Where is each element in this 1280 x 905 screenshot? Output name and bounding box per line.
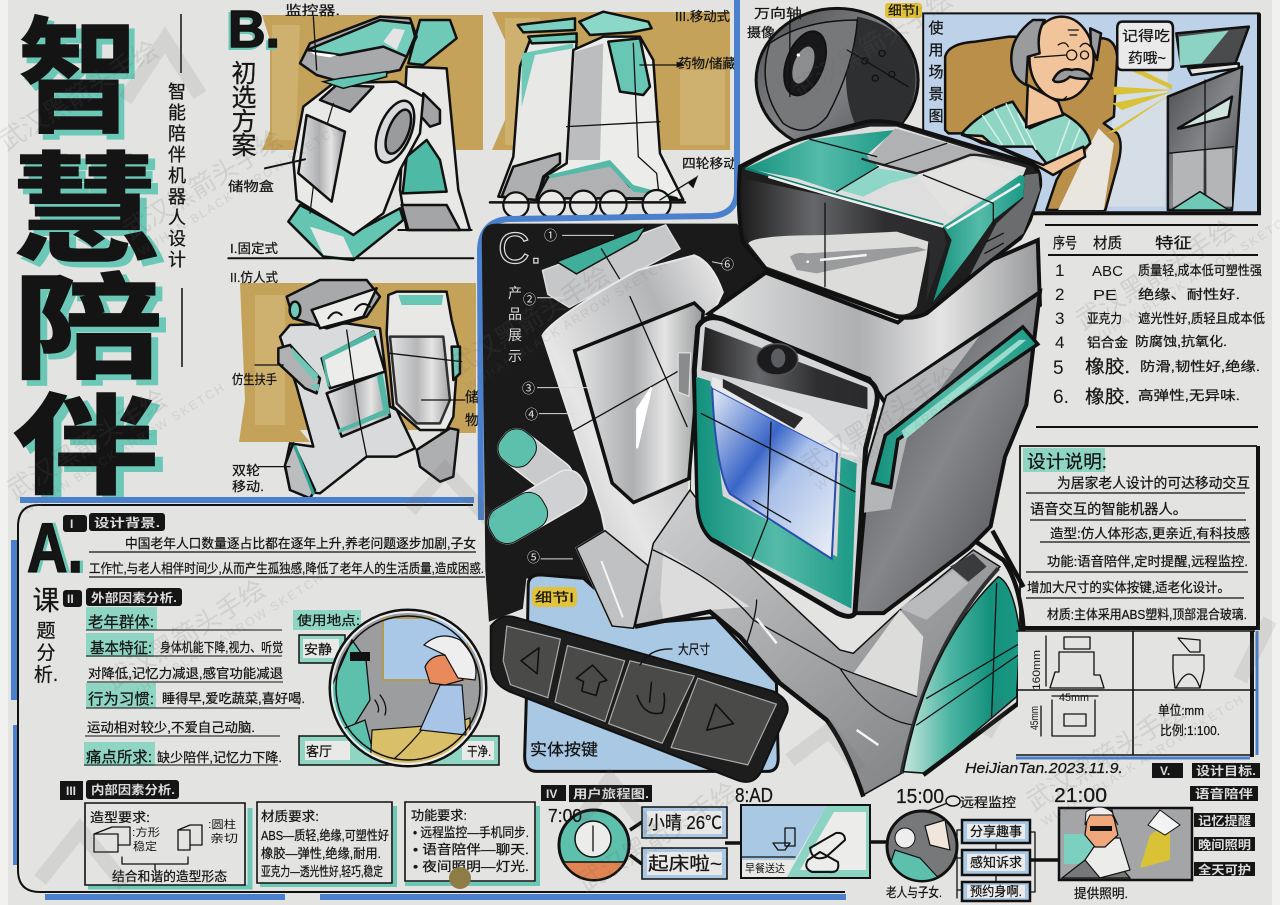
usage scenarios: 干净.: [467, 744, 491, 759]
weather card: 小晴 26℃: [648, 813, 722, 833]
panel C labels: 示: [508, 348, 522, 364]
21:00 night light: [1054, 785, 1192, 901]
blue frame separating section B: [480, 0, 737, 520]
materials table: PE: [1093, 287, 1117, 304]
panel A: analysis: [14, 500, 846, 897]
part 1 sensor: [542, 225, 680, 307]
robot body with window: [694, 240, 1040, 616]
usage scenarios: 客厅: [306, 744, 332, 759]
design description box: 设计说明:: [1027, 452, 1107, 472]
annotation labels: 双轮: [232, 463, 260, 478]
scene and camera labels: 药哦~: [1128, 50, 1166, 66]
teal wheel: [903, 540, 1023, 775]
section I background: 中国老年人口数量逐占比都在逐年上升,养老问题逐步加剧,子女: [125, 536, 476, 551]
watermark: 武汉黑箭头手绘: [118, 124, 288, 246]
materials table: 防滑,韧性好,绝缘.: [1140, 359, 1260, 374]
scene and camera labels: 场: [928, 64, 944, 81]
panel C labels: 实体按键: [530, 741, 598, 759]
speech bubble: [1117, 22, 1173, 70]
15:00 remote monitoring: 老人与子女.: [886, 885, 942, 900]
section I background: I: [70, 517, 73, 531]
watermark: WUHAN BLACK ARROW SKETCH: [813, 356, 1021, 493]
subtitle: vertical text: 能: [168, 103, 186, 123]
section II external factors: 运动相对较少,不爱自己动脑.: [87, 720, 255, 735]
box: material requirements: [257, 802, 395, 885]
panel V goals: 设计目标.: [1196, 763, 1256, 778]
part 3 back plate: [542, 255, 723, 628]
materials table: 材质: [1093, 235, 1122, 252]
watermark: 武汉黑箭头手绘: [1021, 695, 1191, 817]
design description box: 增加大尺寸的实体按键,适老化设计。: [1027, 580, 1230, 595]
watermark: 武汉黑箭头手绘: [2, 383, 172, 505]
materials table: 橡胶.: [1085, 357, 1130, 377]
21:00 night light: 提供照明.: [1074, 886, 1128, 901]
old man: [962, 17, 1101, 175]
voice feature cards: 感知诉求: [970, 855, 1022, 870]
signature: HeiJianTan.2023.11.9.: [965, 760, 1123, 777]
materials table: 5: [1053, 358, 1064, 379]
wake up card: 起床啦~: [648, 854, 722, 874]
heading: IV: [546, 787, 557, 801]
panel C labels: 品: [508, 306, 522, 322]
title: 智慧陪伴: 慧: [10, 113, 160, 287]
materials table: 3: [1055, 309, 1064, 328]
heading: [541, 785, 652, 802]
subtitle: vertical text: 智: [168, 82, 186, 102]
part 4 capsule T piece: [482, 423, 592, 549]
box: shape requirements: :圆柱: [208, 817, 236, 831]
annotation labels: I.固定式: [230, 241, 278, 256]
panel C labels: ②: [523, 292, 536, 307]
scene and camera labels: 图: [928, 108, 944, 125]
materials table: 高弹性,无异味.: [1138, 388, 1240, 403]
scene and camera labels: 万向轴: [754, 6, 802, 21]
section I background: [63, 513, 485, 577]
box: functional requirements: • 夜间照明—灯光.: [413, 859, 529, 874]
robot base: [635, 490, 1000, 797]
panel C labels: ③: [522, 381, 535, 396]
small robot: [1168, 27, 1249, 210]
annotation labels: 仿生扶手: [232, 372, 277, 387]
subtitle: vertical text: 伴: [168, 145, 186, 165]
section II external factors: 痛点所求:: [86, 749, 152, 766]
design description box: [1020, 446, 1258, 630]
8:00 breakfast and pills: 8:AD: [735, 785, 773, 807]
subtitle: vertical text: 计: [168, 250, 186, 270]
panel V goals: 记忆提醒: [1198, 813, 1251, 828]
panel C labels: 细节I: [535, 590, 574, 605]
panel C: black product details: [482, 224, 778, 771]
materials table: 2: [1055, 285, 1064, 304]
annotation labels: 选: [231, 84, 257, 112]
section III internal factors: III: [66, 784, 76, 798]
panel C labels: 展: [508, 327, 522, 343]
scene and camera labels: 摄像: [747, 25, 775, 40]
panel V goals: V.: [1160, 764, 1170, 778]
materials table: 遮光性好,质轻且成本低: [1138, 311, 1265, 326]
panel V goals: 全天可护: [1198, 862, 1251, 877]
panel C labels: ④: [525, 407, 538, 422]
usage scenarios: 使用地点:: [297, 613, 360, 628]
subtitle: vertical text: 设: [168, 229, 186, 249]
panel frame: [14, 500, 846, 897]
design description box: 语音交互的智能机器人。: [1030, 501, 1187, 517]
watermark: 武汉黑箭头手绘: [795, 360, 965, 482]
section II external factors: 老年群体:: [88, 614, 154, 631]
panel V goals: [1152, 763, 1260, 877]
materials table: 橡胶.: [1085, 387, 1130, 407]
design description box: 造型:仿人体形态,更亲近,有科技感: [1050, 526, 1250, 541]
panel C labels: ⑤: [527, 550, 540, 565]
8:00 breakfast and pills: [735, 785, 870, 878]
wake up card: [642, 848, 727, 879]
watermark: WUHAN BLACK ARROW SKETCH: [1039, 691, 1247, 829]
robot II humanoid type: [255, 280, 465, 498]
annotation labels: 移动.: [232, 479, 264, 494]
box: shape requirements: :方形: [132, 825, 160, 839]
usage scenarios: [293, 610, 499, 765]
section II external factors: II: [67, 592, 74, 606]
watermark: WUHAN BLACK ARROW SKETCH: [463, 256, 671, 393]
panel C labels: 大尺寸: [678, 642, 710, 657]
annotation labels: 储: [465, 389, 479, 405]
materials table: ABC: [1092, 263, 1123, 280]
materials table: 亚克力: [1087, 311, 1122, 326]
annotation labels: II.仿人式: [230, 270, 278, 285]
section II external factors: 基本特征:: [90, 640, 152, 657]
watermark: WUHAN BLACK ARROW SKETCH: [20, 380, 228, 517]
keypad blue panel: [525, 575, 778, 771]
box: material requirements: 亚克力—透光性好,轻巧,稳定: [261, 864, 383, 879]
subtitle: vertical text: 人: [168, 208, 186, 228]
annotation labels: III.移动式: [675, 9, 730, 24]
title: 智慧陪伴: 伴: [13, 357, 158, 517]
box: functional requirements: • 语音陪伴—聊天.: [413, 842, 529, 857]
panel V goals: 晚间照明: [1198, 837, 1251, 852]
keypad: [491, 616, 788, 782]
subtitle: vertical text: [168, 14, 186, 367]
robot head: [739, 121, 1040, 318]
materials table: 绝缘、耐性好.: [1138, 287, 1240, 302]
section II external factors: 睡得早,爱吃蔬菜,喜好喝.: [162, 691, 305, 706]
scene and camera labels: 景: [928, 86, 944, 103]
section II external factors: 对降低,记忆力减退,感官功能减退: [88, 666, 283, 681]
circular illustration: elder and robot: [330, 610, 486, 770]
window frame: [694, 318, 877, 616]
box: shape requirements: 稳定: [133, 839, 157, 853]
heading: 用户旅程图.: [573, 786, 649, 801]
vertical topic: 析.: [34, 664, 58, 686]
21:00 night light: 21:00: [1054, 785, 1107, 807]
heading A.: A.: [27, 509, 83, 587]
front view: [1029, 636, 1104, 736]
panel C labels: ⑥: [721, 257, 734, 272]
section II external factors: 身体机能下降,视力、听觉: [160, 640, 283, 655]
materials table: 4: [1055, 333, 1064, 352]
cushion: [1058, 128, 1114, 210]
detail I: gimbal camera ball: [756, 8, 918, 152]
section III internal factors: [60, 780, 179, 800]
orthographic views: [1016, 631, 1257, 758]
scene and camera labels: 用: [928, 42, 944, 59]
robot III mobile type: [490, 12, 698, 218]
heading B.: B.: [228, 1, 280, 59]
box: functional requirements: 功能要求:: [411, 808, 467, 823]
voice feature cards: [957, 820, 1035, 901]
15:00 remote monitoring: 15:00: [896, 786, 944, 808]
design description box: 为居家老人设计的可达移动交互: [1057, 475, 1250, 491]
heading A.: A.: [30, 509, 86, 587]
panel B: concept sketches: [226, 1, 737, 498]
voice feature cards: 分享趣事: [970, 824, 1022, 839]
side view: 单位:mm: [1158, 703, 1204, 718]
vertical topic: 题: [36, 621, 56, 642]
annotation labels: 四轮移动: [682, 156, 737, 171]
section II external factors: 行为习惯:: [88, 691, 154, 708]
panel IV: user journey: [541, 763, 1260, 901]
materials table: [1036, 225, 1265, 427]
section II external factors: 外部因素分析.: [91, 590, 177, 605]
title: 智慧陪伴: 陪: [19, 242, 169, 408]
teal handle: [873, 327, 1038, 487]
design description box: 功能:语音陪伴,定时提醒,远程监控.: [1047, 554, 1248, 569]
annotation labels: 物: [465, 412, 479, 428]
section III internal factors: 内部因素分析.: [91, 782, 175, 797]
box: material requirements: ABS—质轻,绝缘,可塑性好: [261, 828, 389, 843]
front view: 45mm: [1059, 692, 1089, 704]
vertical topic: 课: [32, 586, 60, 616]
side view: 比例:1:100.: [1160, 723, 1220, 738]
section I background: 工作忙,与老人相伴时间少,从而产生孤独感,降低了老年人的生活质量,造成困惑.: [89, 561, 484, 576]
subtitle: vertical text: 器: [168, 187, 186, 207]
annotation labels: 储物盒: [228, 179, 274, 194]
materials table: 质量轻,成本低可塑性强: [1138, 263, 1262, 278]
design description box: 材质:主体采用ABS塑料,顶部混合玻璃.: [1047, 607, 1247, 622]
scene and camera labels: 细节I: [888, 3, 919, 18]
panel V goals: 语音陪伴: [1195, 786, 1253, 801]
panel C labels: ①: [544, 228, 557, 243]
vertical topic: 分: [36, 642, 56, 664]
7:00 alarm clock: 7:00: [548, 806, 582, 826]
front view: 160mm: [1031, 650, 1043, 690]
robot I fixed type: [228, 17, 473, 260]
side view: [1158, 638, 1220, 738]
weather card: [642, 807, 727, 838]
chair: [945, 37, 1121, 210]
front view: 45mm: [1029, 706, 1041, 730]
materials table: 序号: [1053, 235, 1077, 252]
speech beams: [1107, 71, 1172, 133]
title: 智慧陪伴: 慧: [16, 118, 166, 292]
panel C labels: C.: [498, 224, 542, 273]
box: functional requirements: [405, 802, 538, 889]
materials table: 6.: [1053, 387, 1069, 408]
materials table: 防腐蚀,抗氧化.: [1135, 334, 1227, 349]
annotation labels: 案: [231, 132, 257, 160]
15:00 remote monitoring: [885, 786, 1016, 900]
panel C labels: 产: [508, 285, 522, 301]
title: 智慧陪伴: [10, 0, 169, 522]
panel: usage scene: [923, 13, 1259, 213]
subtitle: vertical text: 陪: [168, 124, 186, 144]
box: shape requirements: 亲切: [210, 831, 238, 845]
scene and camera labels: 记得吃: [1122, 28, 1170, 44]
materials table: 1: [1055, 261, 1064, 280]
title: 智慧陪伴: 陪: [13, 237, 163, 403]
box: functional requirements: • 远程监控—手机同步.: [413, 825, 529, 840]
box: shape requirements: 造型要求:: [90, 810, 150, 825]
box: material requirements: 材质要求:: [261, 809, 319, 824]
7:00 alarm clock: [548, 806, 630, 882]
annotation labels: [228, 3, 737, 494]
watermark: WUHAN BLACK ARROW SKETCH: [136, 121, 344, 258]
watermark: WUHAN BLACK ARROW SKETCH: [118, 570, 327, 707]
connector: [630, 822, 1060, 864]
watermark: 武汉黑箭头手绘: [572, 776, 743, 898]
subtitle: vertical text: 机: [168, 166, 186, 186]
heading B.: B.: [226, 3, 278, 61]
section II external factors: [63, 588, 305, 766]
title: 智慧陪伴: 伴: [20, 362, 165, 522]
materials table: 特征: [1155, 235, 1192, 252]
watermark: 武汉黑箭头手绘: [1070, 214, 1241, 336]
materials table: 铝合金: [1087, 335, 1128, 350]
box: shape requirements: [85, 803, 250, 887]
annotation labels: 药物/储藏: [678, 56, 736, 71]
annotation labels: 监控器.: [285, 3, 340, 18]
15:00 remote monitoring: 远程监控: [960, 795, 1016, 810]
background ochre blocks: [239, 12, 730, 442]
scene and camera labels: 使: [928, 20, 944, 37]
watermark: 武汉黑箭头手绘: [445, 260, 615, 382]
box: shape requirements: 结合和谐的造型形态: [112, 869, 227, 884]
usage scenarios: 安静: [304, 642, 332, 657]
box: material requirements: 橡胶—弹性,绝缘,耐用.: [261, 846, 381, 861]
section II external factors: 缺少陪伴,记忆力下降.: [157, 750, 282, 765]
scene and camera labels: [747, 3, 1170, 125]
section I background: 设计背景.: [94, 515, 160, 530]
annotation labels: 方: [231, 108, 257, 136]
watermark: 武汉黑箭头手绘: [100, 574, 271, 696]
panel C labels: [498, 224, 734, 759]
8:00 breakfast and pills: 早餐送达: [745, 861, 785, 875]
voice feature cards: 预约身啊.: [970, 884, 1022, 899]
annotation labels: 初: [231, 60, 257, 88]
